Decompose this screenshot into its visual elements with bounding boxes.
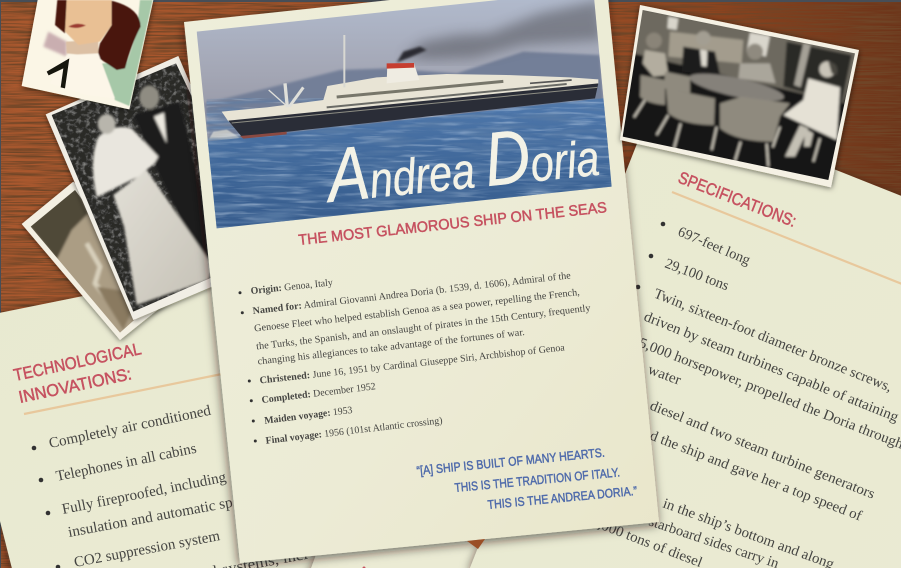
panel: lower centre sheet: [285, 520, 500, 568]
quote: THIS IS THE ANDREA DORIA.”: [487, 484, 638, 512]
sky: [190, 0, 623, 147]
seated boy: [646, 33, 662, 49]
specifications list: 697-feet long: [675, 224, 753, 269]
ship facts list: Named for: Admiral Giovanni Andrea Doria (b. 1539, d. 1606), Admiral of the: [252, 270, 572, 317]
specifications list: 29,100 tons: [663, 256, 731, 294]
ship facts list: [238, 270, 591, 447]
quote: [416, 446, 638, 512]
specifications list: Twin, sixteen-foot diameter bronze screws,: [652, 286, 894, 395]
wood notch between lower sheets: [467, 539, 485, 549]
innovations list: insulation and automatic sp: [67, 495, 234, 541]
innovations list: Completely air conditioned: [48, 403, 213, 452]
ship facts list: Christened: June 16, 1951 by Cardinal Giuseppe Siri, Archbishop of Genoa: [259, 342, 566, 386]
heading: technological innovations: TECHNOLOGICAL: [12, 339, 143, 385]
chairs: [640, 72, 790, 142]
black collar ribbon: [47, 58, 69, 88]
panel: technological innovations: [0, 246, 400, 568]
woman in white dress: [819, 61, 835, 77]
ship facts list: Maiden voyage: 1953: [264, 405, 353, 427]
panel: main sheet: [184, 0, 659, 563]
photo: sepia landscape: [20, 180, 187, 340]
shoreline left: [208, 129, 240, 140]
photo: family at a table: [616, 4, 862, 192]
quote: THIS IS THE TRADITION OF ITALY.: [454, 465, 621, 495]
smoke plume: [403, 0, 603, 60]
ship facts list: Origin: Genoa, Italy: [250, 277, 333, 297]
innovations list: [32, 403, 309, 568]
specifications list: diesel and two steam turbine generators: [648, 398, 877, 503]
quote: “[A] SHIP IS BUILT OF MANY HEARTS.: [416, 446, 605, 478]
sea: [207, 98, 617, 233]
photo: couple in formal wear: [44, 55, 212, 324]
innovations list: Telephones in all cabins: [55, 441, 198, 485]
heading: specifications: SPECIFICATIONS:: [676, 168, 799, 231]
title: Andrea Doria: Andrea Doria: [320, 107, 602, 219]
table: [688, 72, 786, 102]
photo: colourised portrait: [22, 0, 153, 109]
woman's gown: [113, 170, 213, 305]
specifications list: 5,000 tons of diesel: [589, 514, 704, 568]
specifications list: 35,000 horsepower, propelled the Doria through: [630, 332, 901, 453]
cabin wall: [633, 8, 858, 103]
heading: technological innovations: INNOVATIONS:: [17, 364, 133, 407]
ship facts list: Completed: December 1952: [261, 381, 376, 406]
heading: technological innovations: [12, 339, 143, 407]
fur stole: [93, 127, 158, 197]
panel: specifications: [470, 98, 901, 568]
specifications list: d the ship and gave her a top speed of: [648, 428, 864, 525]
innovations list: Fully fireproofed, including: [61, 469, 228, 518]
ship facts list: the Turks, the Spanish, and an onslaught of pirates in the 15th Century, frequently: [256, 303, 591, 352]
man in dark suit: [132, 100, 210, 278]
distant hills: [205, 52, 603, 143]
ship photograph: [190, 0, 623, 233]
specifications list: water: [646, 362, 683, 389]
seated woman: [747, 44, 763, 60]
ship: [222, 35, 598, 139]
specifications list: [589, 222, 901, 568]
subtitle: THE MOST GLAMOROUS SHIP ON THE SEAS: [298, 199, 608, 249]
ship facts list: Final voyage: 1956 (101st Atlantic crossing): [265, 415, 443, 447]
seated man: [696, 30, 711, 38]
ship facts list: Genoese Fleet who helped establish Genoa as a sea power, repelling the French,: [254, 287, 580, 334]
ship facts list: changing his allegiances to take advantage of the fortunes of war.: [257, 327, 525, 367]
specifications list: driven by steam turbines capable of attaining: [642, 309, 901, 426]
